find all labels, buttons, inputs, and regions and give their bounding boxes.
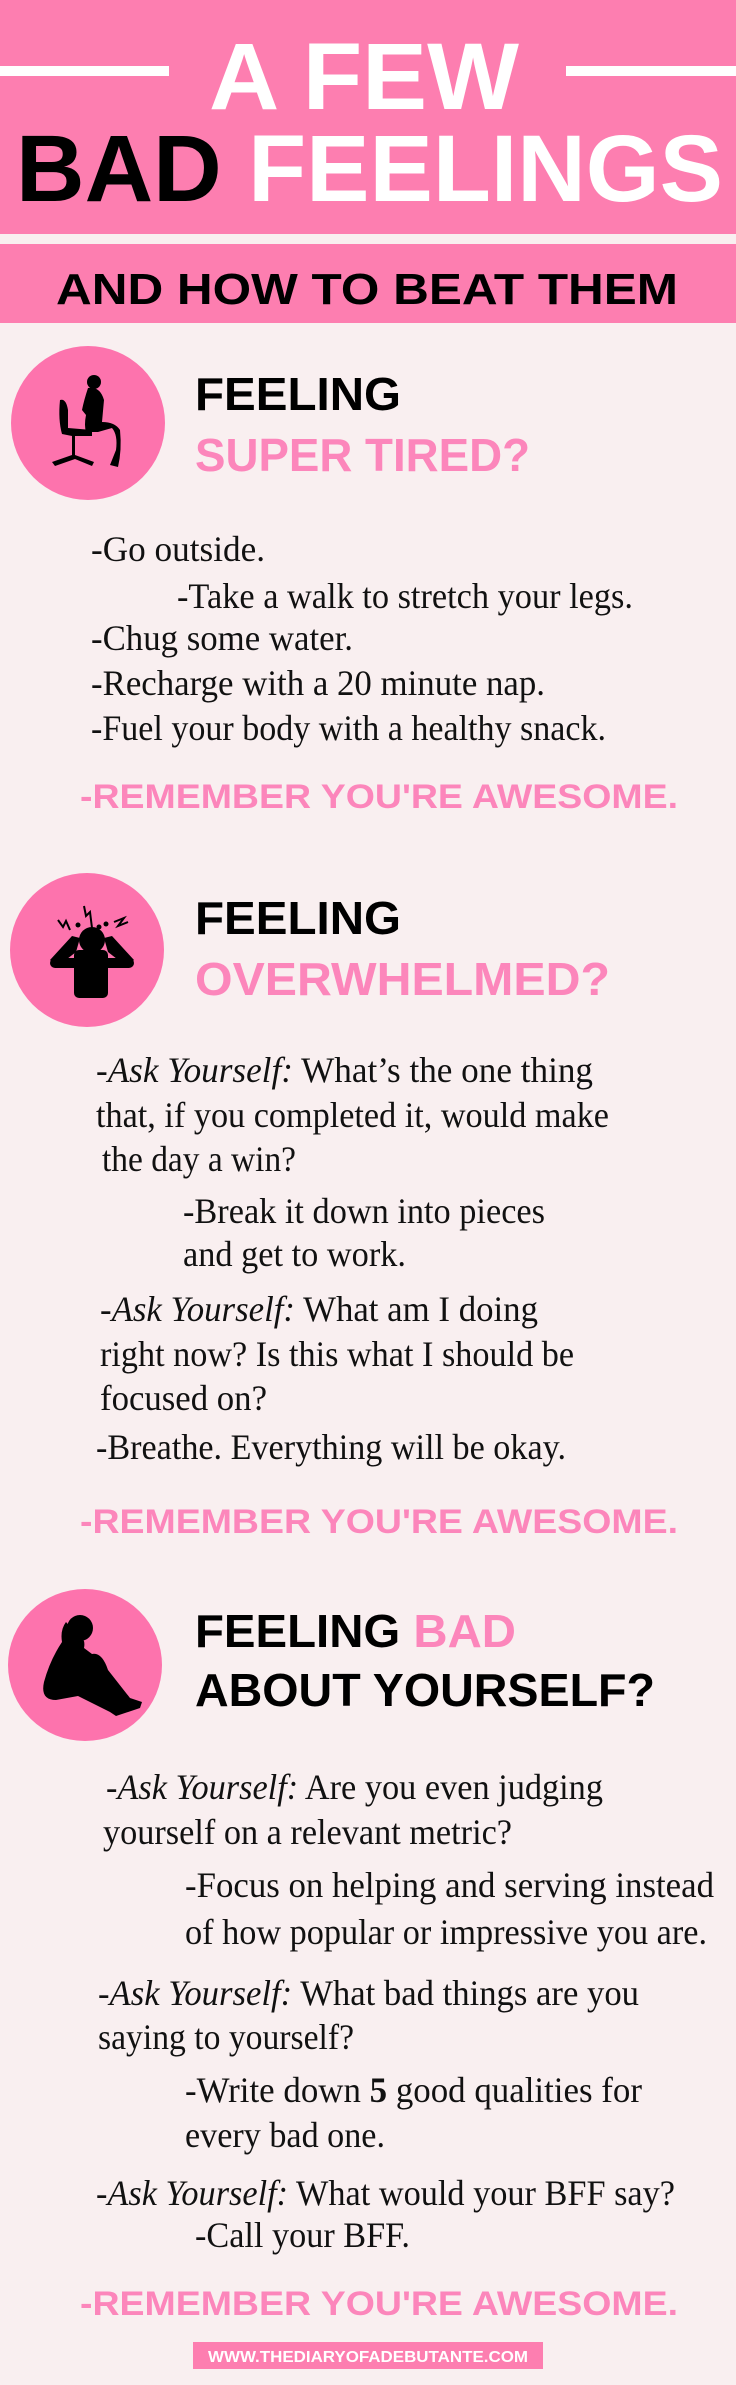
heading: feeling bad about yourself: ABOUT YOURSELF? [195, 1664, 655, 1716]
title: A FEW: A FEW [209, 24, 519, 130]
text block: overwhelmed tips: -Ask Yourself: What am I doing [100, 1289, 538, 1329]
icon: overwhelmed person [10, 873, 164, 1027]
subtitle band [0, 244, 736, 323]
heading: feeling super tired: SUPER TIRED? [195, 429, 530, 481]
text block: self tips: -Focus on helping and serving instead [185, 1865, 714, 1905]
heading: feeling overwhelmed [195, 892, 610, 1005]
text block: overwhelmed tips: -Breathe. Everything will be okay. [96, 1427, 566, 1467]
text block: tired tips: -Fuel your body with a healthy snack. [91, 708, 606, 748]
text block: overwhelmed tips: and get to work. [183, 1234, 406, 1274]
text block: tired tips: -Recharge with a 20 minute nap. [91, 663, 545, 703]
heading: feeling bad about yourself [195, 1605, 655, 1716]
subtitle band: AND HOW TO BEAT THEM [56, 265, 678, 314]
text block: self tips: -Ask Yourself: What bad things are you [98, 1973, 639, 2013]
callout: remember 3: -REMEMBER YOU'RE AWESOME. [80, 2285, 678, 2323]
title: BAD FEELINGS: BAD FEELINGS [16, 116, 723, 222]
text block: overwhelmed tips: -Break it down into pieces [183, 1191, 545, 1231]
heading: feeling super tired [195, 368, 530, 481]
callout: remember 1: -REMEMBER YOU'RE AWESOME. [80, 778, 678, 816]
text block: tired tips [91, 529, 633, 748]
footer url: WWW.THEDIARYOFADEBUTANTE.COM [208, 2349, 528, 2366]
text block: self tips: saying to yourself? [98, 2017, 354, 2057]
heading: feeling super tired: FEELING [195, 368, 401, 420]
text block: overwhelmed tips [96, 1050, 609, 1467]
text block: self tips: yourself on a relevant metric? [103, 1812, 512, 1852]
text block: self tips: -Write down 5 good qualities for [185, 2070, 642, 2110]
text block: overwhelmed tips: that, if you completed it, would make [96, 1095, 609, 1135]
text block: tired tips: -Take a walk to stretch your legs. [177, 576, 633, 616]
icon: sad sitting woman [8, 1589, 162, 1741]
text block: overwhelmed tips: focused on? [100, 1378, 267, 1418]
text block: tired tips: -Go outside. [91, 529, 265, 569]
text block: self tips: -Ask Yourself: What would your BFF say? [96, 2173, 675, 2213]
footer url [193, 2342, 543, 2369]
icon: woman on office chair [11, 346, 165, 500]
text block: self tips: of how popular or impressive you are. [185, 1912, 707, 1952]
heading: feeling overwhelmed: FEELING [195, 892, 401, 944]
heading: feeling overwhelmed: OVERWHELMED? [195, 953, 610, 1005]
text block: self tips: -Call your BFF. [195, 2215, 410, 2255]
text block: self tips [96, 1767, 714, 2255]
text block: self tips: -Ask Yourself: Are you even judging [106, 1767, 603, 1807]
text block: overwhelmed tips: right now? Is this what I should be [100, 1334, 574, 1374]
callout: remember 2: -REMEMBER YOU'RE AWESOME. [80, 1503, 678, 1541]
heading: feeling bad about yourself: FEELING BAD [195, 1605, 516, 1657]
text block: overwhelmed tips: -Ask Yourself: What’s the one thing [96, 1050, 593, 1090]
header banner [0, 0, 736, 234]
text block: tired tips: -Chug some water. [91, 618, 353, 658]
text block: self tips: every bad one. [185, 2115, 385, 2155]
text block: overwhelmed tips: the day a win? [102, 1139, 296, 1179]
